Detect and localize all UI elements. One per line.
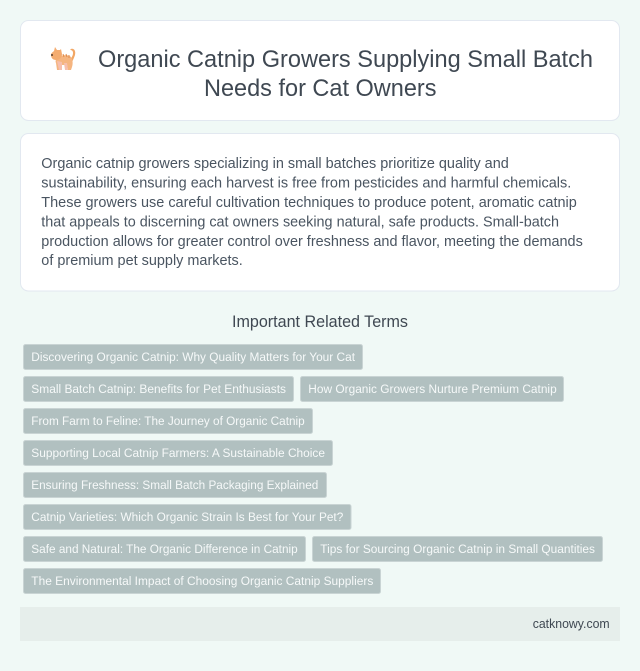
icon: cat: [51, 47, 75, 70]
tag: [24, 536, 306, 562]
tag: Supporting Local Catnip Farmers: A Sustainable Choice: [31, 446, 325, 460]
tag: Small Batch Catnip: Benefits for Pet Enthusiasts: [31, 382, 286, 396]
tag: How Organic Growers Nurture Premium Catnip: [308, 382, 557, 396]
tag: [300, 376, 564, 402]
tag: [312, 536, 602, 562]
tag: [24, 408, 312, 434]
tag: From Farm to Feline: The Journey of Organic Catnip: [31, 414, 305, 428]
tag: The Environmental Impact of Choosing Organic Catnip Suppliers: [31, 574, 373, 588]
tag: [24, 568, 380, 594]
tag: [24, 472, 326, 498]
tag list: [24, 344, 602, 594]
heading: important related terms: Important Related Terms: [232, 313, 408, 331]
footer: catknowy.com: [533, 616, 610, 631]
tag: Safe and Natural: The Organic Difference in Catnip: [31, 542, 298, 556]
text block: description: of premium pet supply markets.: [41, 253, 243, 269]
text block: description: production allows for greater control over freshness and flavor, meeting the demands: [41, 234, 583, 250]
panel: description: [20, 134, 620, 291]
tag: [24, 376, 294, 402]
tag: [24, 344, 362, 370]
text block: description: Organic catnip growers specializing in small batches prioritize quality and: [41, 156, 509, 172]
panel: title card: [20, 20, 620, 120]
tag: Tips for Sourcing Organic Catnip in Small Quantities: [320, 542, 595, 556]
text block: description: [41, 156, 583, 269]
text block: description: These growers use careful cultivation techniques to produce potent, aromatic catnip: [41, 195, 577, 211]
tag: [24, 440, 332, 466]
tag: Ensuring Freshness: Small Batch Packaging Explained: [31, 478, 318, 492]
title: Organic Catnip Growers Supplying Small Batch: [98, 46, 593, 73]
title: [98, 46, 593, 102]
tag: [24, 504, 351, 530]
text block: description: that appeals to discerning cat owners seeking natural, safe products. Small-batch: [41, 214, 559, 230]
title: Needs for Cat Owners: [204, 75, 436, 102]
footer: [20, 607, 620, 641]
tag: Discovering Organic Catnip: Why Quality Matters for Your Cat: [31, 350, 356, 364]
text block: description: sustainability, ensuring each harvest is free from pesticides and harmful chemicals.: [41, 176, 571, 192]
tag: Catnip Varieties: Which Organic Strain Is Best for Your Pet?: [31, 510, 343, 524]
